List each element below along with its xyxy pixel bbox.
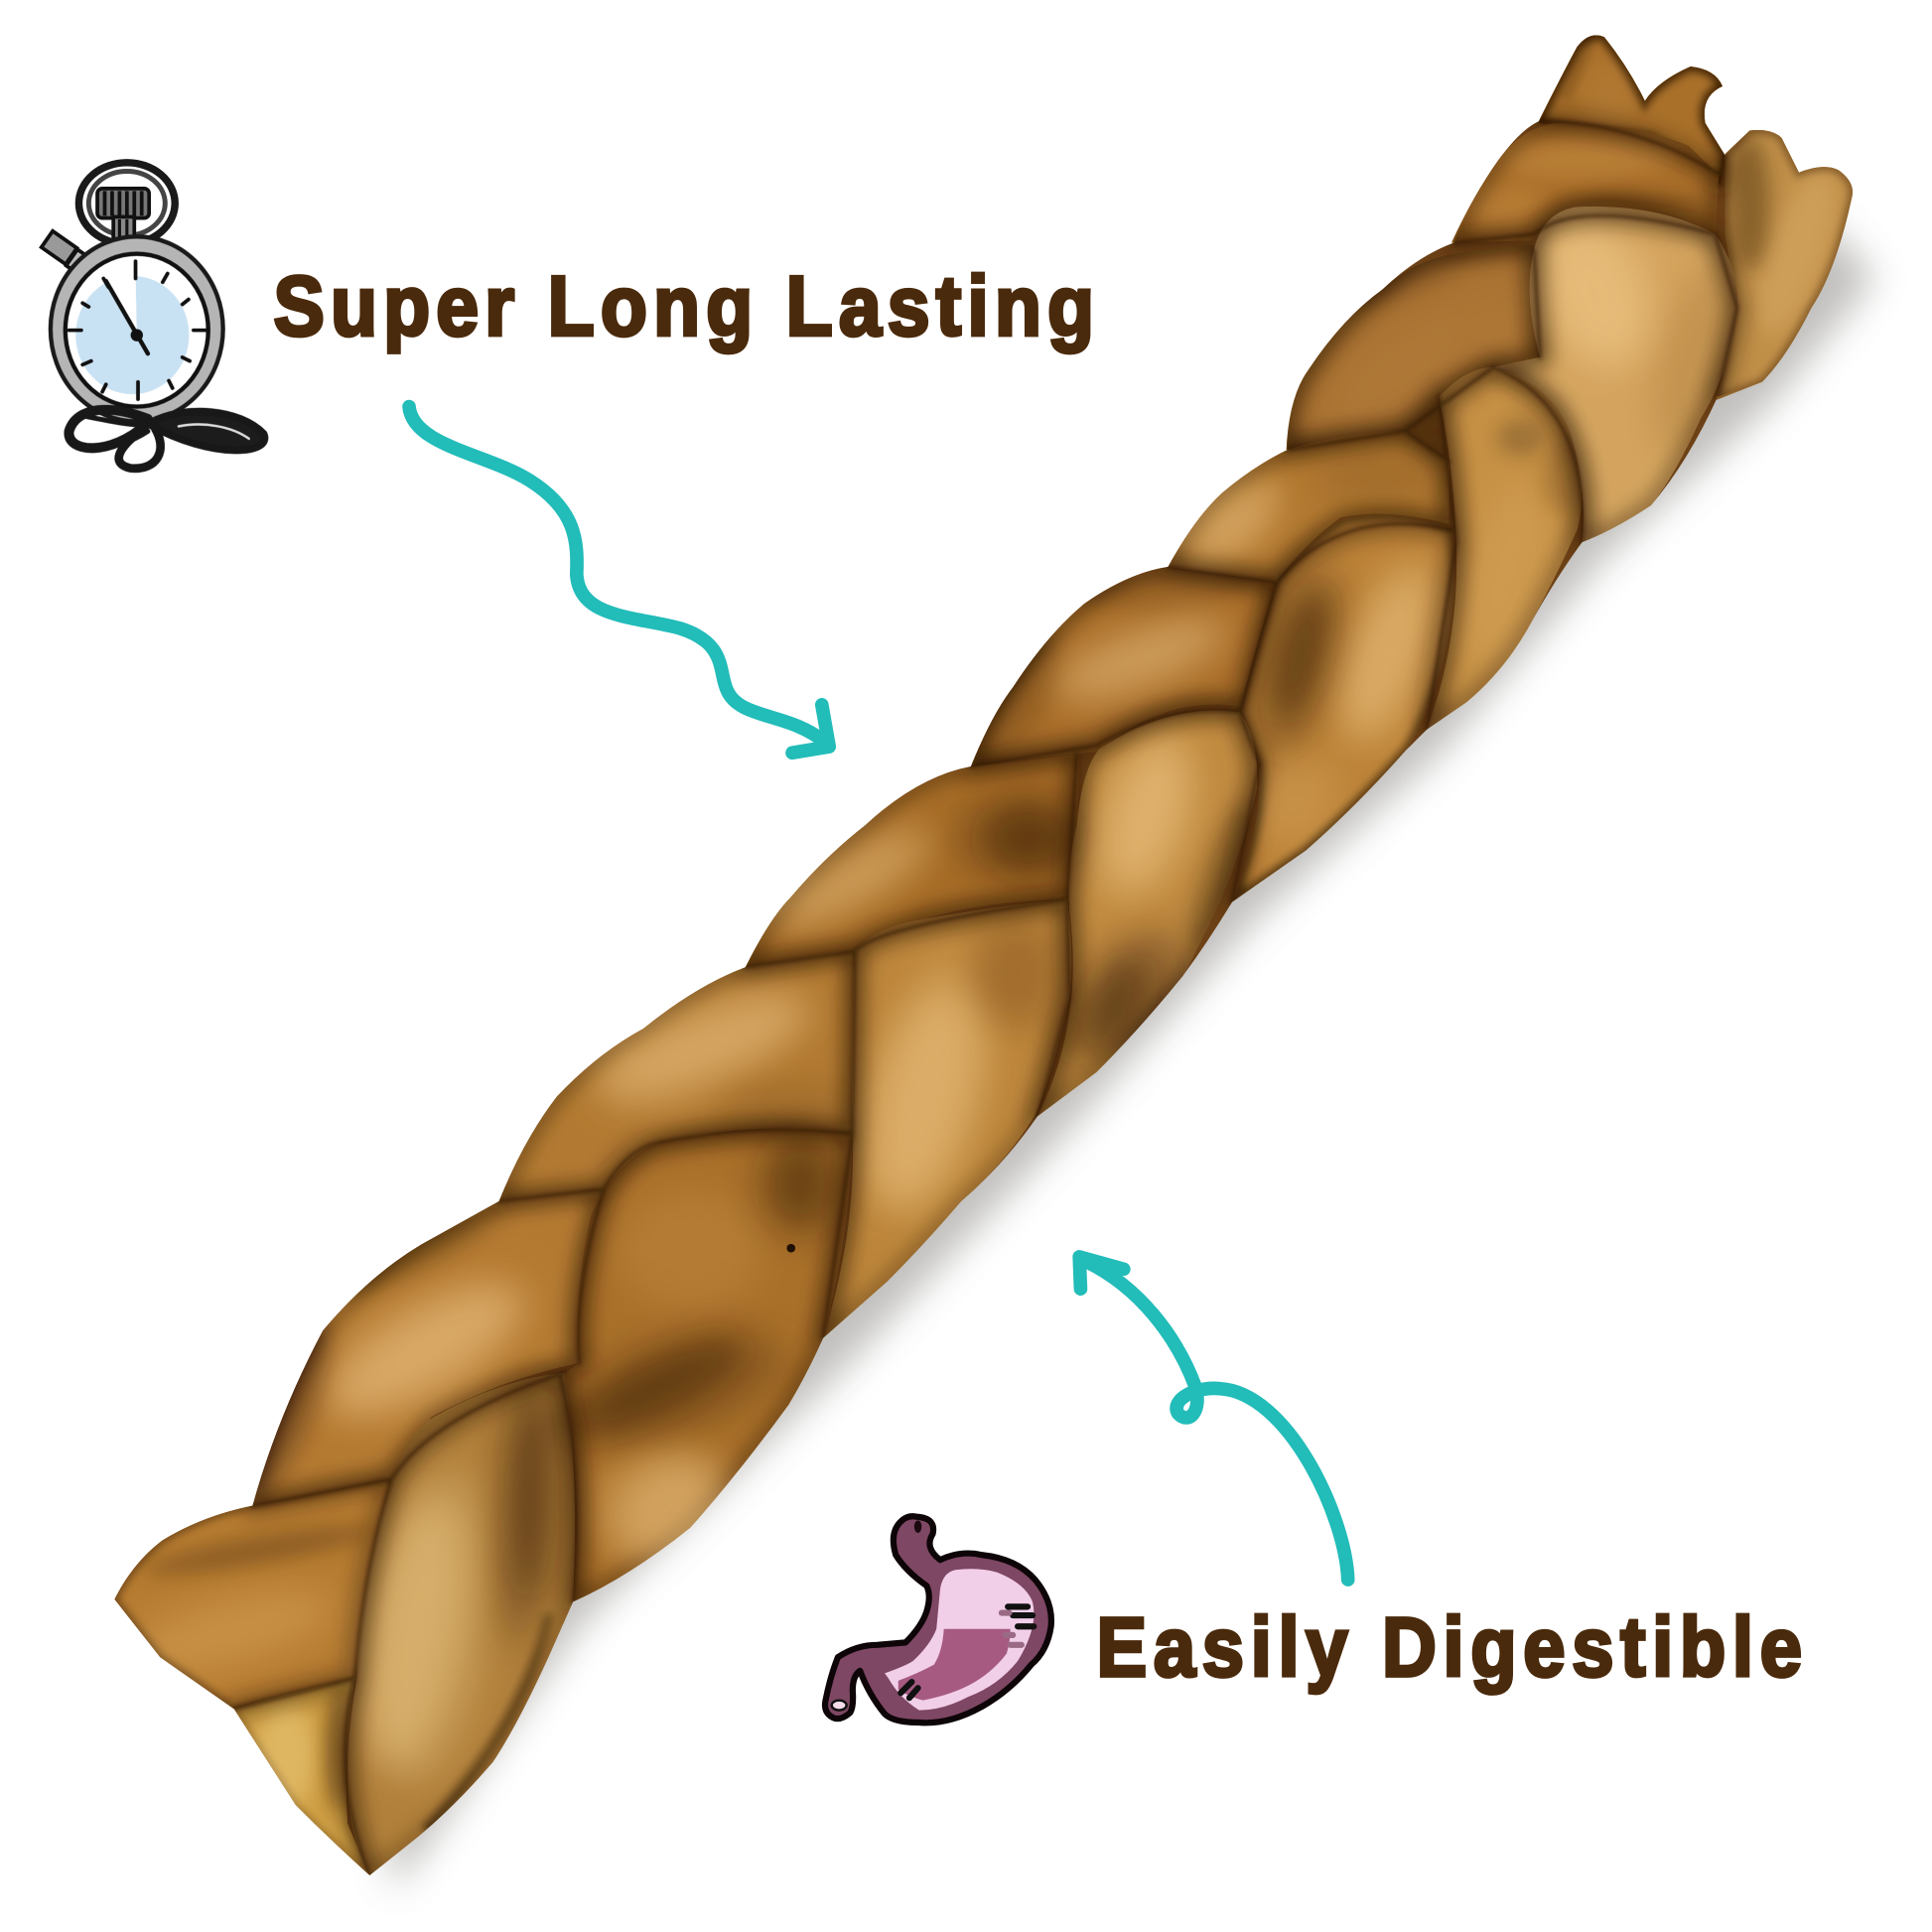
strand: bottom tip <box>234 1678 369 1875</box>
stopwatch cord <box>69 410 265 469</box>
strand: right end <box>1716 130 1854 400</box>
braid shadow <box>369 221 1875 1891</box>
stopwatch hand <box>106 281 148 353</box>
dial ticks <box>69 261 208 399</box>
arrow: to braid from Easily Digestible <box>1079 1257 1348 1580</box>
strand: upper cross <box>1287 244 1543 450</box>
braid tonal overlay <box>316 210 1665 1774</box>
stomach inner pink <box>885 1569 1034 1711</box>
strand: end left cross <box>112 1478 394 1709</box>
arrow: to braid from Super Long Lasting <box>409 407 829 753</box>
stopwatch loop <box>78 163 175 244</box>
strand: center cross <box>499 949 863 1201</box>
elapsed time dial <box>75 276 189 394</box>
strand: dark spot leaf <box>1427 367 1583 730</box>
strand: mid cross <box>971 574 1269 766</box>
stomach stripes <box>900 1606 1034 1698</box>
strand: center right leaf <box>1037 711 1259 1116</box>
strand: upper mid cross <box>1166 431 1449 586</box>
strand: lower leaf <box>347 1373 575 1875</box>
stopwatch crown <box>97 189 149 244</box>
stopwatch case <box>51 236 223 421</box>
heading: Easily Digestible: Easily Digestible <box>1097 1600 1802 1695</box>
strand: lower center leaf <box>561 1130 853 1601</box>
stopwatch icon <box>42 163 265 469</box>
stomach icon <box>825 1516 1051 1723</box>
strand: big upper leaf <box>1493 201 1750 542</box>
strand: mid dark leaf <box>1228 515 1469 901</box>
speck <box>786 1244 795 1253</box>
braid seams <box>234 121 1737 1875</box>
stopwatch pusher <box>42 231 76 264</box>
stopwatch face <box>66 254 208 407</box>
stomach contents <box>898 1629 1011 1701</box>
duodenum opening <box>832 1701 847 1711</box>
stomach outer wall <box>825 1516 1051 1723</box>
strand: lower cross <box>232 1187 607 1506</box>
strand: center upper cross <box>746 755 1084 967</box>
strand: frayed top tip <box>1538 36 1725 185</box>
strand: center leaf <box>823 899 1071 1338</box>
esophagus opening <box>914 1520 921 1533</box>
strand: top cross <box>1451 123 1719 242</box>
heading: Super Long Lasting: Super Long Lasting <box>274 259 1094 353</box>
